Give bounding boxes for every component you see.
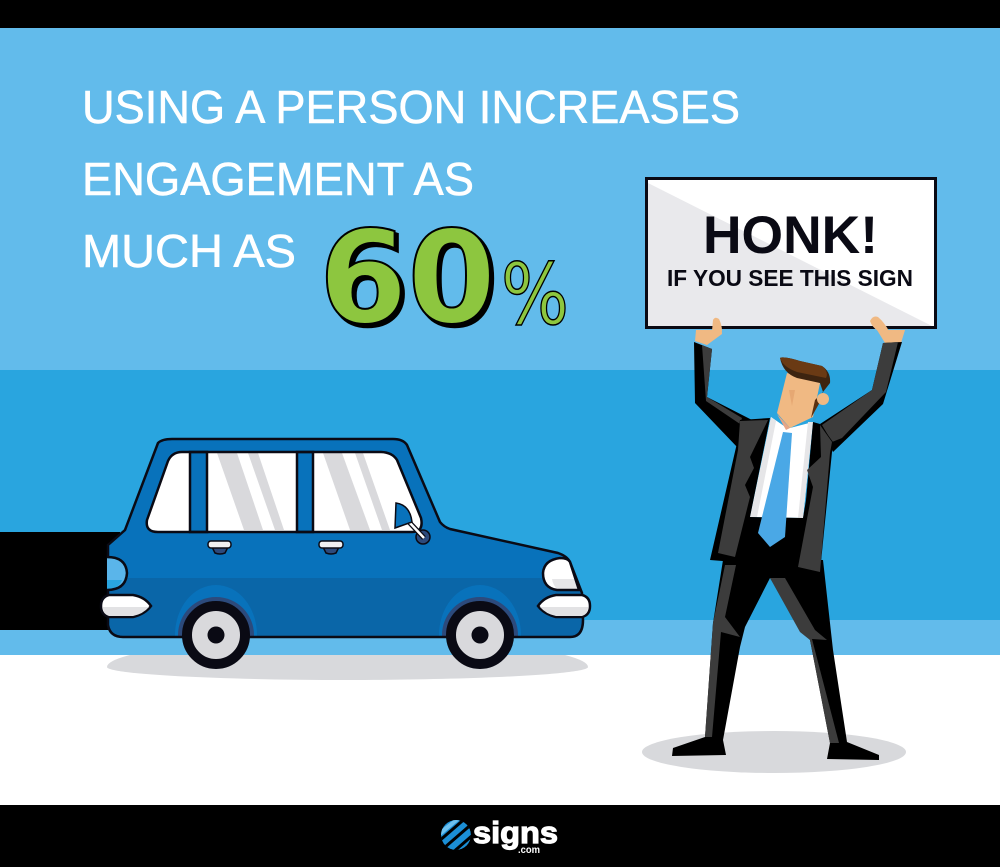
tail light	[107, 557, 127, 590]
person shadow	[642, 731, 906, 773]
logo: .com	[518, 845, 540, 856]
door handles	[208, 541, 343, 554]
car shadow	[107, 655, 588, 680]
headlight	[543, 558, 579, 590]
headline: USING A PERSON INCREASES	[82, 81, 740, 133]
headline: MUCH AS	[82, 225, 296, 277]
tie	[758, 432, 792, 547]
logo	[441, 820, 558, 853]
head	[777, 357, 830, 428]
sign	[646, 178, 936, 328]
wheels	[187, 606, 509, 664]
bumpers	[101, 595, 590, 617]
hand thumbs over sign	[712, 316, 889, 331]
windows	[147, 452, 422, 532]
60 percent statistic: 60	[322, 207, 499, 356]
headline	[82, 81, 740, 277]
logo wordmark: signs	[473, 815, 558, 850]
logo icon	[441, 820, 471, 850]
legs	[672, 560, 879, 760]
60 percent statistic: %	[501, 246, 569, 345]
car body	[108, 439, 583, 637]
shirt	[750, 414, 813, 518]
black trailing shape behind car	[0, 532, 120, 630]
sign heading: HONK!	[703, 206, 878, 265]
jacket	[710, 418, 833, 572]
right arm	[820, 342, 902, 452]
car	[100, 439, 590, 685]
side mirror	[395, 503, 430, 544]
hands	[695, 318, 905, 345]
left arm	[694, 342, 752, 448]
60 percent statistic: 60	[319, 204, 496, 353]
person holding sign	[672, 318, 905, 760]
sign subheading: IF YOU SEE THIS SIGN	[667, 265, 913, 291]
60 percent statistic	[319, 204, 569, 356]
headline: ENGAGEMENT AS	[82, 153, 474, 205]
